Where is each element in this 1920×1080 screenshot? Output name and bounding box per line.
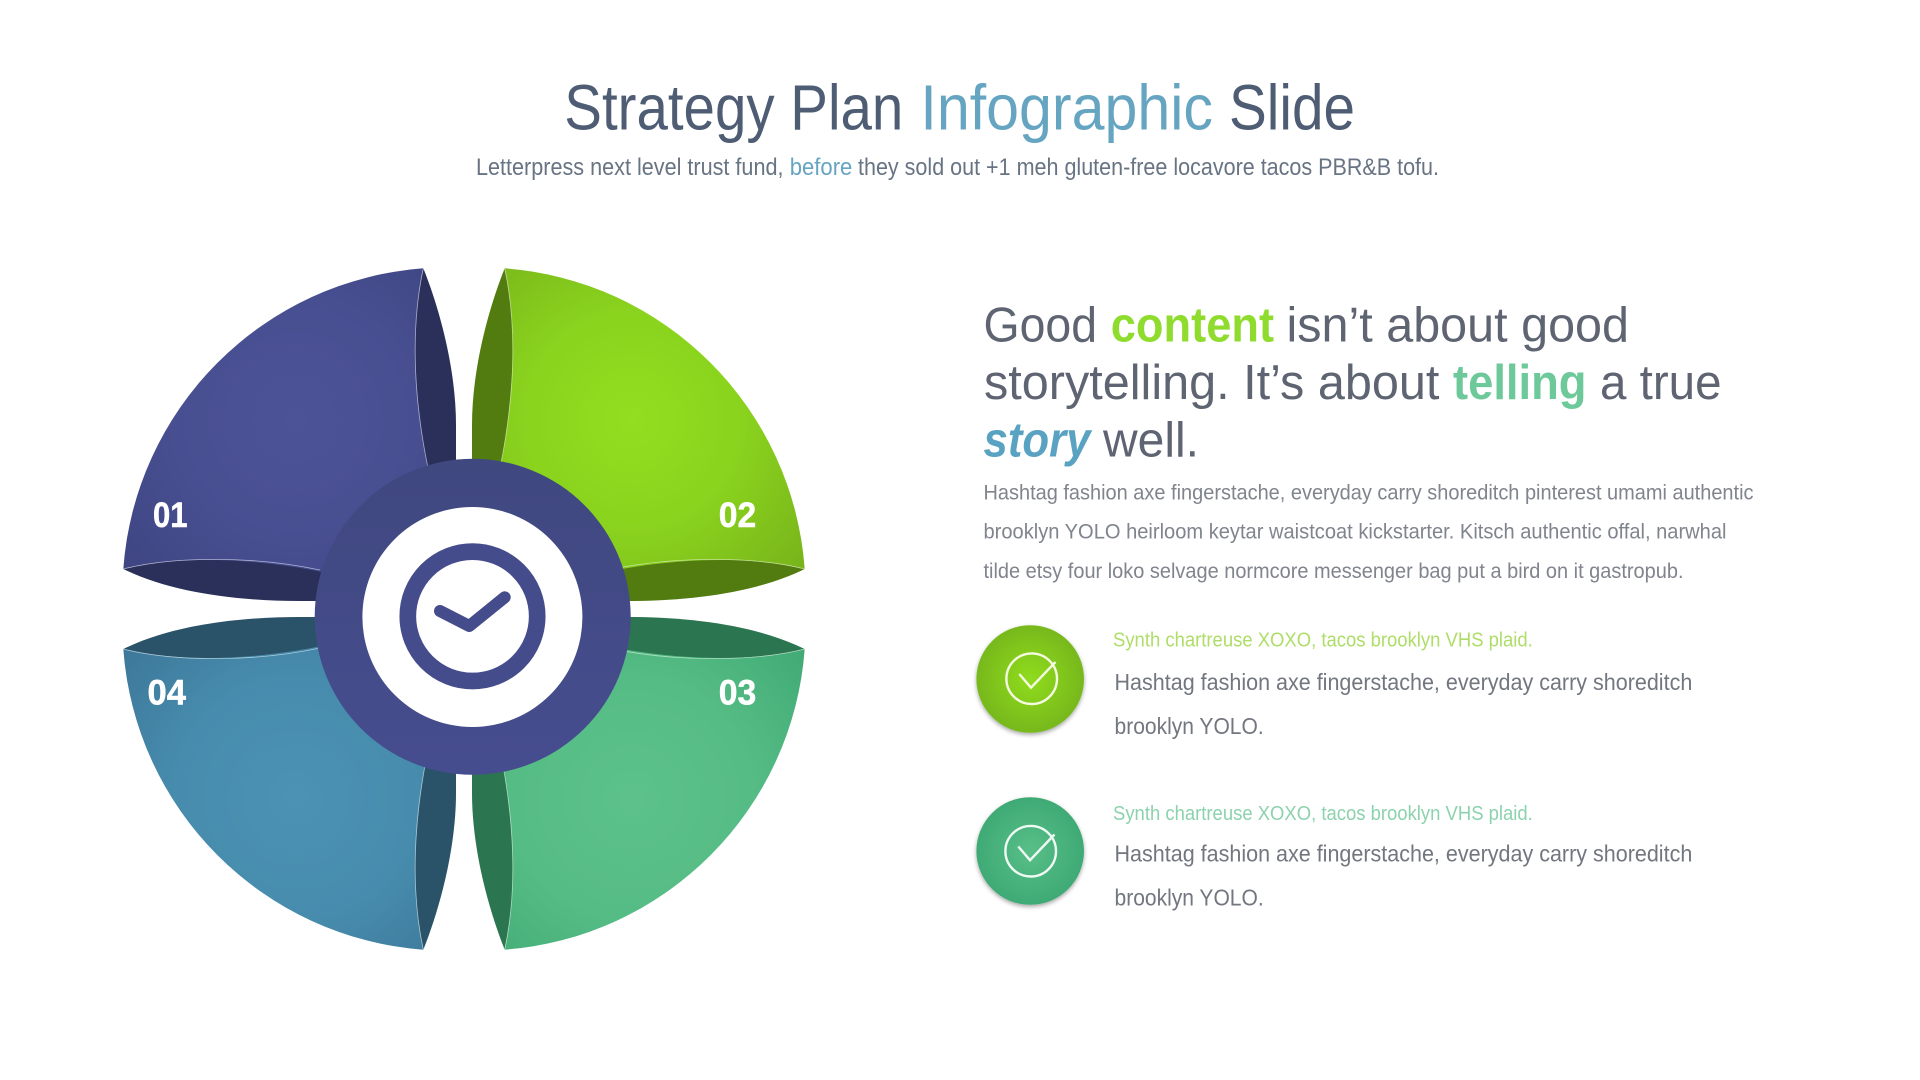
- subtitle: they sold out +1 meh gluten-free locavore tacos PBR&B tofu.: [858, 154, 1439, 181]
- number 03: 03: [719, 674, 756, 712]
- headline line 3: story: [984, 414, 1093, 468]
- title: Infographic: [920, 72, 1213, 144]
- icon: green check badge: [976, 625, 1084, 733]
- item 1 label: Synth chartreuse XOXO, tacos brooklyn VHS plaid.: [1113, 629, 1533, 651]
- item 1 body: brooklyn YOLO.: [1114, 713, 1264, 739]
- item 1 body: [1114, 669, 1692, 739]
- paragraph: brooklyn YOLO heirloom keytar waistcoat kickstarter. Kitsch authentic offal, narwhal: [984, 521, 1726, 544]
- headline line 2: a true: [1600, 356, 1722, 410]
- petal 01: [123, 268, 456, 601]
- headline line 1: content: [1111, 299, 1274, 353]
- number 04: 04: [148, 674, 187, 712]
- headline line 3: well.: [1102, 414, 1199, 468]
- list item 2: [976, 797, 1692, 910]
- number 02: 02: [719, 496, 756, 535]
- paragraph: tilde etsy four loko selvage normcore messenger bag put a bird on it gastropub.: [984, 560, 1684, 583]
- item 1 body: Hashtag fashion axe fingerstache, everyday carry shoreditch: [1114, 669, 1692, 695]
- item 2 body: Hashtag fashion axe fingerstache, everyday carry shoreditch: [1114, 841, 1692, 867]
- petal 02: [472, 268, 805, 601]
- center hub with clock icon: [315, 459, 631, 775]
- icon: clock: [408, 552, 537, 681]
- headline: [984, 299, 1722, 468]
- title: Strategy Plan: [564, 72, 903, 144]
- headline line 1: Good: [984, 299, 1097, 353]
- item 2 body: [1114, 841, 1692, 910]
- subtitle: before: [790, 154, 852, 181]
- number 01: 01: [153, 496, 188, 535]
- item 2 label: Synth chartreuse XOXO, tacos brooklyn VHS plaid.: [1113, 803, 1533, 825]
- petal 03: [472, 617, 805, 950]
- title: Slide: [1229, 72, 1355, 144]
- paragraph: [984, 481, 1754, 583]
- item 2 body: brooklyn YOLO.: [1114, 884, 1264, 910]
- paragraph: Hashtag fashion axe fingerstache, everyday carry shoreditch pinterest umami authentic: [984, 481, 1754, 504]
- headline line 1: isn’t about good: [1286, 299, 1629, 353]
- quadrant diagram: [123, 268, 805, 950]
- subtitle: Letterpress next level trust fund,: [476, 154, 784, 181]
- icon: teal check badge: [976, 797, 1084, 905]
- petal 04: [123, 617, 456, 950]
- headline line 2: storytelling. It’s about: [984, 356, 1440, 410]
- list item 1: [976, 625, 1692, 739]
- headline line 2: telling: [1453, 356, 1586, 410]
